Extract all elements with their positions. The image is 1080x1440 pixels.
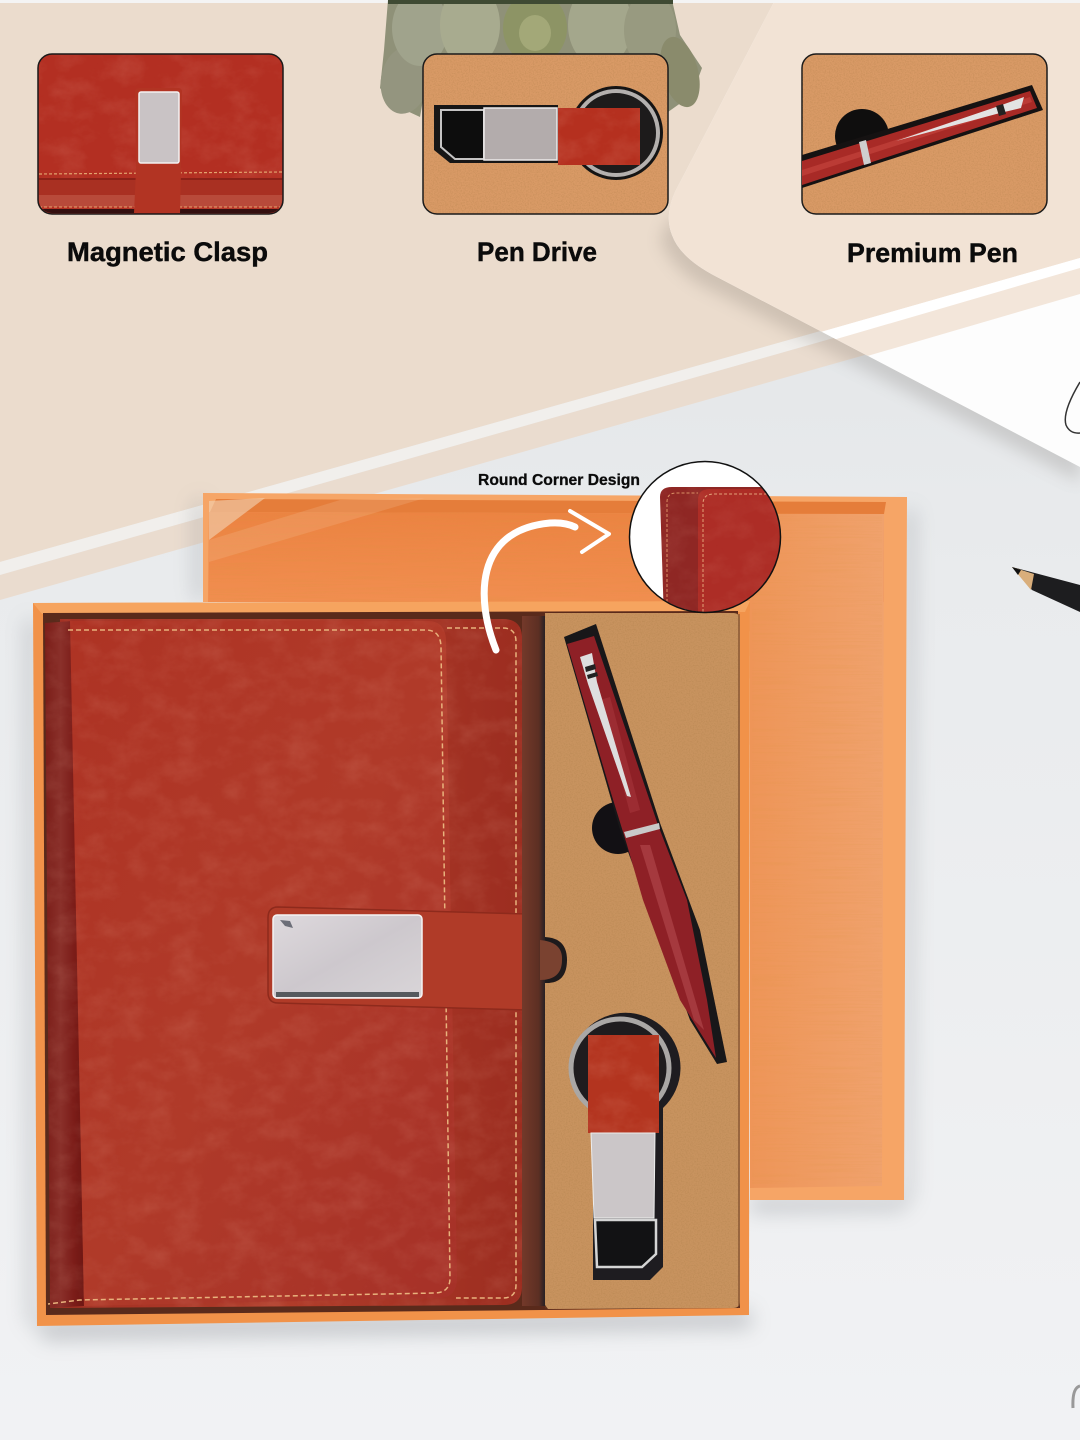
- icon: corner clip: [1073, 1386, 1080, 1408]
- notebook back stitching: [447, 628, 516, 1298]
- metal clasp: [273, 915, 422, 998]
- notebook spine: [45, 621, 84, 1308]
- top edge strip: [0, 0, 1080, 3]
- drive recess: [570, 1013, 680, 1280]
- callout: round corner design: [478, 460, 790, 650]
- drive ring: [571, 1019, 669, 1117]
- drive black insert: [595, 1220, 656, 1267]
- drive metal: [591, 1133, 655, 1218]
- pen recess: [564, 624, 727, 1064]
- pen clip: [580, 653, 631, 797]
- lid glare: [209, 498, 265, 540]
- tray gap: [522, 616, 546, 1306]
- pen body: [567, 636, 716, 1058]
- laptop corner: [668, 3, 1080, 467]
- magnetic strap: [268, 907, 528, 1010]
- icon: pencil: [1012, 567, 1080, 612]
- lid top inner shade: [210, 499, 886, 514]
- pen drive: [570, 1013, 680, 1280]
- callout zoom circle: [630, 462, 780, 612]
- notebook front stitching: [48, 630, 450, 1304]
- premium pen: [564, 624, 727, 1064]
- notebook back cover: [50, 619, 522, 1308]
- callout arrow: [484, 523, 575, 650]
- icon: succulent plant: [375, 0, 707, 118]
- gift box lid: [203, 493, 907, 1200]
- notebook: [45, 619, 528, 1309]
- beige backdrop: [0, 0, 1080, 600]
- pen and drive tray: [522, 613, 740, 1309]
- panel: magnetic clasp: [38, 54, 283, 214]
- box shadow: [26, 500, 914, 1340]
- gift box base: [33, 601, 750, 1326]
- drive leather: [588, 1035, 659, 1133]
- laptop shadow: [660, 215, 1080, 482]
- heading: magnetic clasp: Magnetic Clasp: [67, 237, 268, 267]
- callout label: Round Corner Design: [478, 472, 640, 489]
- pen band: [624, 823, 660, 838]
- pen highlight: [640, 845, 704, 1030]
- lid right inside: [750, 514, 884, 1188]
- lid back wall: [208, 512, 884, 602]
- heading: pen drive: Pen Drive: [477, 237, 597, 267]
- panel: pen drive: [423, 54, 668, 214]
- heading: premium pen: Premium Pen: [847, 238, 1018, 268]
- panel: premium pen: [802, 54, 1047, 214]
- notebook front cover: [70, 621, 457, 1306]
